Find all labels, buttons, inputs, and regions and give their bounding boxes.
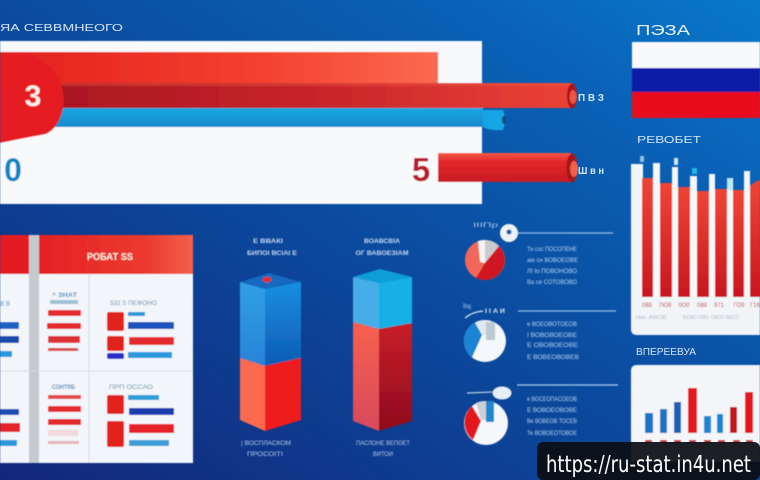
heading: bottom right chart: ВПЕРЕЕВУА	[636, 347, 696, 358]
panel: top right column chart	[631, 156, 760, 335]
flag	[632, 42, 760, 118]
column labels: ГО9	[734, 303, 745, 309]
bar two body	[353, 269, 412, 431]
table header right	[39, 235, 193, 274]
tube label bottom: Ш в н	[578, 166, 604, 177]
heading: flag: ПЭЗА	[636, 22, 690, 39]
column sub labels: ОВОО ВЕСО	[711, 315, 740, 321]
red columns	[642, 178, 760, 297]
bar two caption: ВОАВСВІА	[364, 239, 401, 245]
tube label top: П В З	[578, 93, 604, 104]
bar two caption	[356, 239, 408, 257]
callout line	[467, 392, 492, 393]
cell: far-left top	[0, 301, 19, 357]
list	[527, 247, 578, 286]
cell: icon list top: 531 5 ПЕФОНО	[110, 300, 157, 307]
column markers	[640, 156, 732, 190]
pie	[464, 401, 508, 445]
panel base	[631, 164, 760, 335]
list	[527, 322, 579, 361]
cell: icon list bottom: ПРП ОССАО	[109, 384, 153, 391]
table dividers	[0, 274, 193, 463]
column sub labels: БОВО ОВО	[683, 315, 710, 321]
cell: red list top	[47, 291, 81, 351]
column sub labels: тмо АВОЕ	[635, 315, 667, 321]
column labels: 088	[697, 303, 708, 309]
column sub labels	[635, 315, 740, 321]
badge	[492, 386, 512, 400]
value 0: 0	[4, 152, 22, 188]
panel: horizontal tube chart	[0, 41, 578, 204]
column labels: 7Ю9	[659, 303, 672, 309]
callout curve	[465, 311, 483, 318]
list: е ВОСЕОПАСОЕОВ	[527, 397, 577, 403]
pie label: Вид	[463, 303, 471, 310]
list: Е ВОВЕОВОВЕВ	[527, 355, 579, 361]
3D bar one	[240, 239, 301, 458]
bar one body	[240, 273, 301, 431]
panel base	[631, 365, 760, 462]
bar one footer	[241, 441, 291, 458]
table background	[0, 235, 193, 463]
pie label: І І А И	[485, 308, 505, 315]
red tube	[50, 83, 577, 108]
short red tube	[438, 153, 578, 182]
bar two footer: ВИТОИ	[373, 452, 393, 458]
bar one footer: ПРОСОІТІ	[247, 452, 283, 458]
list: І ВОВОВОЕОВЕ	[527, 333, 577, 339]
bar one footer: | ВОСПЛАСКОМ	[241, 441, 291, 447]
white columns	[653, 163, 750, 297]
red badge with value 3: 3	[25, 80, 41, 113]
panel: bottom right column chart	[631, 365, 760, 462]
table header left	[0, 235, 29, 274]
3D bar two	[353, 239, 412, 458]
cell: red list bottom	[48, 384, 81, 444]
panel background	[0, 41, 482, 204]
cell: icon list bottom	[107, 384, 174, 447]
bar one caption: Е ВВАКІ	[253, 239, 283, 245]
pie block three	[464, 385, 618, 445]
list: Те ВОВОЕОТОВОЕ	[527, 431, 577, 437]
pie block two	[463, 303, 616, 362]
cell: far-left top: 8 8	[0, 301, 10, 308]
pie label	[463, 303, 505, 315]
table title: РОБАТ SS	[87, 252, 133, 263]
bar two footer: ПАСЛОНЕ ВЕПОЕТ	[356, 441, 410, 447]
red wide bar	[0, 52, 438, 100]
cell: far-left bottom	[0, 409, 20, 446]
bar two footer	[356, 441, 410, 458]
list: аю сн ВОВОЕОВЕ	[527, 258, 578, 264]
rule	[518, 310, 616, 312]
column labels: Г16	[750, 303, 760, 309]
cell: icon list top	[107, 300, 174, 359]
value 5: 5	[412, 151, 430, 188]
red badge with value 3	[0, 55, 64, 143]
blue tube	[50, 108, 506, 130]
watermark	[537, 442, 760, 480]
heading: top right chart: РЕВОБЕТ	[637, 134, 702, 146]
pie label: ІІІПр	[473, 222, 499, 229]
column labels: 0О0	[678, 303, 690, 309]
pie	[464, 320, 506, 362]
rule	[518, 232, 613, 234]
cell: red list bottom: СОНТЯБ	[52, 384, 75, 391]
list: Ва се СОТОВОВО	[527, 280, 577, 286]
list: Е ОВОВОЕОВЕ	[527, 343, 578, 349]
pie block one	[465, 222, 613, 286]
columns	[645, 388, 753, 433]
list: Е ВОВОЕОВОВЕ	[527, 408, 577, 414]
list: е ВОЕОВОТОЕОВ	[527, 322, 577, 328]
heading: top panel: ЯА СЕВВМНЕОГО	[0, 23, 123, 34]
bar two caption: ОГ ВАВОЕЗІАМ	[356, 251, 408, 257]
list: ЛІ Іо ПОВОНОВО	[527, 269, 577, 275]
panel: table	[0, 235, 193, 463]
grey column	[29, 235, 39, 463]
badge	[500, 224, 518, 242]
rule	[517, 384, 618, 386]
cell: red list top: ^ ЗНАТ	[52, 291, 77, 299]
column labels: 971	[714, 303, 725, 309]
list: Ти сос ПОСОПЕНЕ	[527, 247, 577, 253]
bar one caption	[247, 239, 297, 257]
column ticks	[645, 440, 753, 443]
bar one caption: БИПОІ ВСІАІ Е	[247, 251, 297, 257]
column labels	[642, 303, 760, 309]
pie	[465, 240, 505, 280]
list: Ве ВОВЕОВ ТОСЕВ	[527, 419, 577, 425]
column labels: 088	[642, 303, 653, 309]
list	[527, 397, 577, 437]
